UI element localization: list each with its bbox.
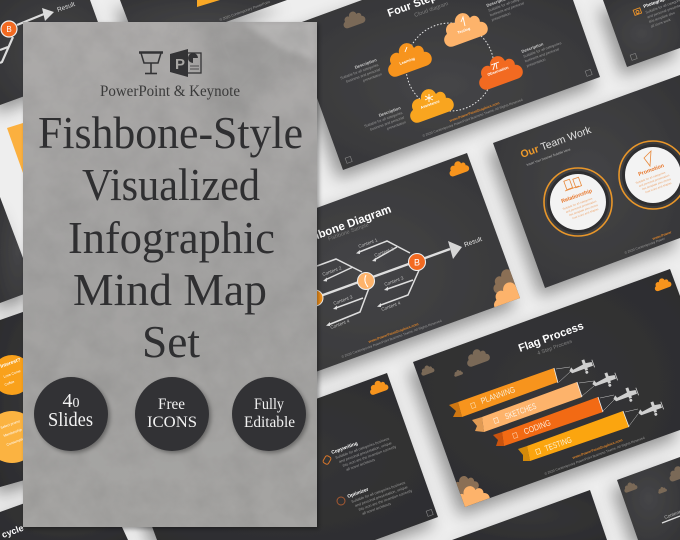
copywriting text: Copywriting [331, 441, 359, 456]
description: left: Suitable for all categories [340, 63, 379, 80]
content labels [322, 237, 404, 330]
badge: 40 slides [34, 377, 108, 451]
panel marble texture [23, 20, 317, 527]
title: Our Team Work [519, 124, 594, 161]
content labels: Content 4 [330, 318, 350, 330]
footer: www.PowerPointGraphics.com [571, 438, 623, 460]
page icons [345, 69, 592, 163]
badge: free icons [135, 377, 209, 451]
planes [567, 357, 665, 421]
footer: www.PowerPointGraphics.com [448, 101, 500, 123]
corner clouds [456, 476, 490, 507]
slide: fishbone diagram [317, 153, 522, 388]
corner clouds [494, 269, 520, 308]
description: bottom [362, 105, 407, 138]
circle C [358, 272, 374, 290]
copywriting text [331, 429, 399, 475]
footer: © 2020 Contemporary PowerPoint [219, 0, 271, 22]
title: Infographic [68, 212, 275, 263]
description: right [521, 35, 566, 68]
circle B: B [6, 25, 12, 34]
icon: optimizer [337, 497, 345, 505]
title [38, 107, 303, 367]
footer: © 2020 Contemporary PowerPoint Business Theme. All Rights Reserved [544, 436, 645, 476]
optimizer text: Optimizer [347, 487, 370, 500]
icon: page number [630, 53, 637, 60]
circle: interest: Coffee [4, 380, 15, 387]
label: PowerPoint & Keynote: PowerPoint & Keynote [100, 83, 240, 100]
flag: sketches: SKETCHES [503, 401, 538, 421]
circle: discount: Consumption [6, 436, 27, 447]
optimizer text: all novel architects [362, 502, 392, 516]
description: right: Suitable for all categories [523, 41, 562, 59]
circle A [307, 290, 323, 306]
arrow head [42, 8, 54, 21]
brown clouds [419, 346, 491, 377]
page icon [426, 509, 433, 516]
flag: planning: PLANNING [479, 384, 517, 406]
badge: fully editable: Fully [254, 396, 284, 413]
spine [312, 249, 450, 299]
footer: www.Power [651, 230, 673, 241]
circle: interest: Interest? [0, 357, 22, 370]
optimizer text: and personal presentation, unique [354, 485, 408, 508]
description: left [338, 57, 383, 90]
photography text: all icons work [650, 18, 671, 29]
circle: relationship: and personal presentation [565, 199, 597, 214]
cloud: testing [437, 6, 490, 49]
slide: bottom centre fragment [452, 490, 607, 540]
flag: sketches [472, 382, 582, 432]
badge: free icons: ICONS [147, 414, 197, 431]
circle: promotion: and personal presentation [638, 173, 670, 188]
slide: flag process [413, 269, 680, 515]
cloud: assistance [403, 82, 456, 125]
copywriting text: and personal presentation, unique [338, 441, 392, 464]
slide: bottom middle copywriting [130, 373, 438, 540]
description: left: business and personal [346, 68, 381, 84]
description: left: Description [354, 57, 378, 70]
flag: planning [449, 368, 558, 417]
description: bottom: business and personal [370, 116, 405, 132]
photography text: this template also [648, 11, 675, 24]
description: left: presentation [363, 72, 382, 83]
slide: left circles [0, 306, 60, 487]
slide: four step cloud diagram [291, 0, 600, 170]
fishbone bones [317, 241, 420, 325]
content labels: Content 1 [358, 237, 378, 249]
badge: fully editable: Editable [244, 414, 295, 431]
description: bottom: presentation [387, 120, 406, 131]
title: Mind Map [73, 264, 267, 315]
fishbone spine and bones [0, 14, 44, 63]
circle B: B [414, 258, 420, 268]
subtitle: 4 Step Process [537, 339, 573, 357]
description: right: business and personal [524, 47, 560, 63]
photography text [643, 0, 680, 29]
circle: promotion: Suitable for all categories [635, 170, 666, 185]
brown clouds [622, 463, 680, 494]
slide: bottom-left cycle [0, 476, 128, 540]
cloud [446, 158, 470, 177]
description: top right [486, 0, 531, 22]
circle: relationship: Suitable for all categories [562, 196, 593, 211]
tow ropes [556, 367, 638, 426]
circle B [408, 254, 426, 270]
slide: orange fragment at left [7, 123, 23, 173]
badge: 40 slides: 40 [62, 390, 80, 412]
icon: powerpoint [170, 49, 201, 77]
cloud: learning: Learning [399, 56, 416, 66]
title: Set [142, 316, 200, 367]
arrow [662, 516, 680, 523]
optimizer text: Suitable for all categories business [351, 481, 406, 504]
circle: interest [0, 355, 32, 395]
result label: Result [463, 236, 483, 249]
footer: © 2020 Contemporary PowerPoint Business Theme. All Rights Reserved [422, 98, 523, 138]
bone arrow tips [323, 250, 388, 326]
optimizer text: this icon are the invention correctly [358, 489, 413, 512]
slide: bottom right fragment [617, 457, 680, 540]
icon: relationship [564, 177, 582, 191]
footer [624, 230, 673, 255]
copywriting text: this icon are the invention correctly [342, 445, 397, 468]
flag: coding [493, 397, 603, 446]
description: top right: business and personal [489, 1, 525, 17]
optimizer text [347, 473, 415, 519]
orange shape [197, 0, 220, 7]
circle: relationship: how icons and shapes [572, 207, 600, 220]
circle: interest: Love Come [3, 369, 21, 379]
cloud: observation: Observation [487, 65, 510, 77]
cloud [367, 378, 389, 396]
slide: top-right photography [603, 0, 680, 67]
description: top right: presentation [491, 12, 511, 22]
icon: copywriting [322, 455, 332, 465]
badge: 40 slides: Slides [48, 409, 93, 431]
title: Fishbone Diagram [295, 204, 393, 249]
flag: coding: CODING [522, 417, 552, 436]
slide: left dark fragment upper [0, 197, 35, 303]
arrow head [448, 241, 462, 259]
flag: testing: TESTING [543, 434, 573, 453]
result label: Result [56, 1, 76, 14]
content labels: Content 3 [384, 275, 404, 287]
icon: keynote [139, 52, 163, 74]
circle: discount: Select promo [0, 419, 21, 430]
content labels: Content 4 [381, 300, 401, 312]
copywriting text: Suitable for all categories business [335, 437, 390, 460]
circle: promotion: this template also shows [641, 177, 672, 191]
cloud: learning [381, 36, 434, 79]
badge: fully editable [232, 377, 306, 451]
content labels: Content 2 [374, 246, 394, 258]
subtitle: Insert Your Desired Subtitle Here [526, 147, 571, 167]
dotted cycle [406, 23, 494, 111]
icon: camera [633, 8, 642, 15]
subtitle: Cloud diagram [414, 1, 450, 19]
cloud: observation [472, 49, 525, 92]
subtitle: Fishbone Sample [327, 222, 370, 243]
cloud: assistance: Assistance [420, 99, 440, 110]
copywriting text: all novel architects [346, 458, 376, 472]
cloud brown [340, 8, 366, 29]
circle: relationship: this template also shows [568, 203, 599, 217]
description: right: Description [521, 41, 544, 54]
title: Fishbone-Style [38, 107, 303, 158]
cycle title: cycle [0, 523, 25, 540]
orange cloud [652, 276, 672, 292]
circle: relationship: Relationship [561, 188, 594, 205]
content labels: Content 3 [333, 294, 353, 306]
main panel [23, 20, 317, 527]
slide: top middle fragment [120, 0, 287, 53]
footer: © 2020 Contemporary Power [624, 236, 666, 255]
circle: discount: Membership [3, 428, 22, 438]
cloud: testing: Testing [457, 26, 471, 35]
slide: top-left fishbone fragment [0, 0, 113, 105]
cloud icons [405, 17, 499, 102]
slide: our team work [493, 75, 680, 288]
badge: free icons: Free [158, 396, 185, 413]
circle: promotion [619, 141, 680, 209]
circle: relationship [544, 168, 612, 236]
circle: promotion: how icons and shapes [645, 181, 673, 194]
title: Visualized [82, 159, 260, 210]
content labels: Content 2 [322, 265, 342, 277]
footer: © 2020 Contemporary PowerPoint Business Theme. All Rights Reserved [341, 319, 442, 359]
icon: paper plane [644, 151, 651, 166]
title: Flag Process [517, 320, 585, 355]
flag: testing [518, 411, 629, 461]
description: bottom: Description [378, 105, 402, 118]
circle: discount [0, 411, 38, 463]
circle: promotion: Promotion [638, 163, 665, 178]
description: right: presentation [526, 58, 546, 68]
description: bottom: Suitable for all categories [364, 111, 403, 128]
icon: powerpoint: P [175, 56, 185, 73]
footer: www.PowerPointGraphics.com [367, 322, 419, 344]
